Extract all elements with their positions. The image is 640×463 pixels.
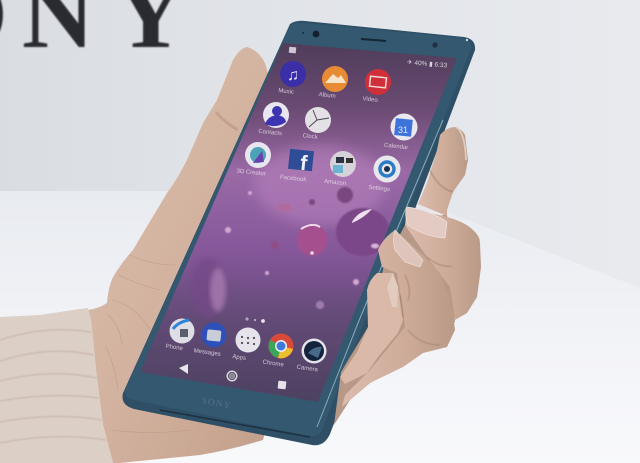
white table surface [0, 191, 640, 463]
phone screen [140, 43, 457, 402]
label: music: Music [278, 88, 294, 96]
icon: calendar [390, 114, 418, 140]
icon: 3d creator [245, 142, 271, 168]
icon: music [280, 61, 306, 87]
icon: calendar: 31 [398, 125, 408, 135]
phone edge highlight [317, 120, 443, 427]
label: 3d creator: 3D Creator [236, 168, 266, 178]
label: contacts: Contacts [258, 129, 282, 137]
icon: phone [170, 318, 194, 344]
finger: index shadow [430, 170, 453, 192]
finger: middle [405, 207, 481, 320]
label: settings: Settings [368, 185, 390, 193]
label: facebook: Facebook [280, 175, 308, 183]
label: apps: Apps [232, 354, 246, 362]
palm creases [105, 255, 190, 432]
skin behind fingers [334, 214, 455, 425]
nail: middle [406, 207, 447, 238]
label: album: Album [318, 92, 336, 100]
label: calendar: Calendar [384, 143, 409, 151]
icon: amazon [330, 151, 356, 177]
wallpaper droplet centre [297, 224, 327, 256]
nav: back [179, 364, 188, 374]
wallpaper glow [255, 145, 385, 225]
nav: home [226, 370, 238, 382]
label: video: Video [362, 96, 379, 104]
front camera and speaker [302, 31, 468, 48]
label: phone: Phone [165, 344, 184, 352]
phone body [122, 21, 475, 445]
icon: apps [236, 328, 260, 352]
icon: settings [374, 156, 400, 182]
status bar: ✈ 40% ▮ 6:33 [407, 59, 448, 70]
nav: recent [278, 381, 286, 389]
nail: little [387, 273, 398, 307]
background wall [0, 0, 640, 300]
icon: messages [202, 322, 226, 348]
wallpaper droplets small [225, 187, 359, 309]
phone bottom edge shadow [160, 410, 310, 437]
finger: little [340, 273, 403, 384]
hand palm and thumb [88, 47, 300, 463]
label: chrome: Chrome [262, 360, 285, 369]
label: clock: Clock [302, 133, 319, 141]
sweater cuff [0, 308, 113, 463]
status bar [289, 47, 448, 70]
label: amazon: Amazon [324, 179, 346, 187]
nail: ring [394, 230, 423, 267]
wallpaper petal left [198, 260, 216, 316]
finger: index [418, 127, 468, 216]
label: camera: Camera [296, 365, 319, 374]
finger: ring [342, 230, 455, 407]
icon: music: ♫ [287, 67, 299, 84]
finger: index nail edge [456, 127, 466, 160]
icon: video [365, 69, 391, 95]
phone SONY mark: SONY [200, 396, 232, 412]
finger creases [400, 257, 452, 345]
icon: facebook [288, 149, 314, 175]
wallpaper droplet large [336, 208, 390, 256]
page dots [245, 317, 265, 323]
icon: camera [302, 338, 326, 364]
icon: facebook: f [299, 152, 309, 175]
icon: album [322, 66, 348, 92]
label: messages: Messages [193, 348, 221, 358]
phone front glass [125, 23, 471, 436]
table edge shadow [0, 189, 170, 191]
thumb joint shadow [216, 112, 238, 130]
icon: chrome [268, 334, 294, 358]
icon: clock [305, 107, 331, 133]
icon: contacts [263, 102, 289, 128]
